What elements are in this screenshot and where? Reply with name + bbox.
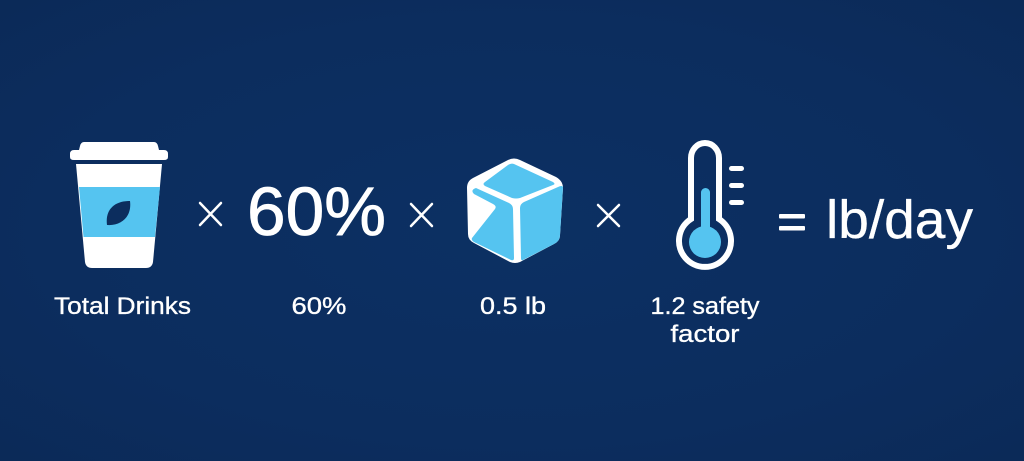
multiply sign 2 xyxy=(411,204,432,226)
icon: thermometer xyxy=(679,143,744,267)
multiply sign 3 xyxy=(598,205,619,226)
big number 60%: 60% xyxy=(247,173,386,250)
label: safety factor xyxy=(650,293,760,348)
icon: coffee cup xyxy=(70,142,168,268)
label: 0.5 lb: 0.5 lb xyxy=(480,293,546,320)
label: safety factor: 1.2 safety xyxy=(650,293,760,320)
label: safety factor: factor xyxy=(670,321,740,348)
label: total drinks: Total Drinks xyxy=(54,293,191,320)
icon: ice cube xyxy=(467,158,563,263)
multiply sign 1 xyxy=(200,203,221,225)
result: lb per day: lb/day xyxy=(826,190,973,250)
label: 60%: 60% xyxy=(292,293,346,320)
